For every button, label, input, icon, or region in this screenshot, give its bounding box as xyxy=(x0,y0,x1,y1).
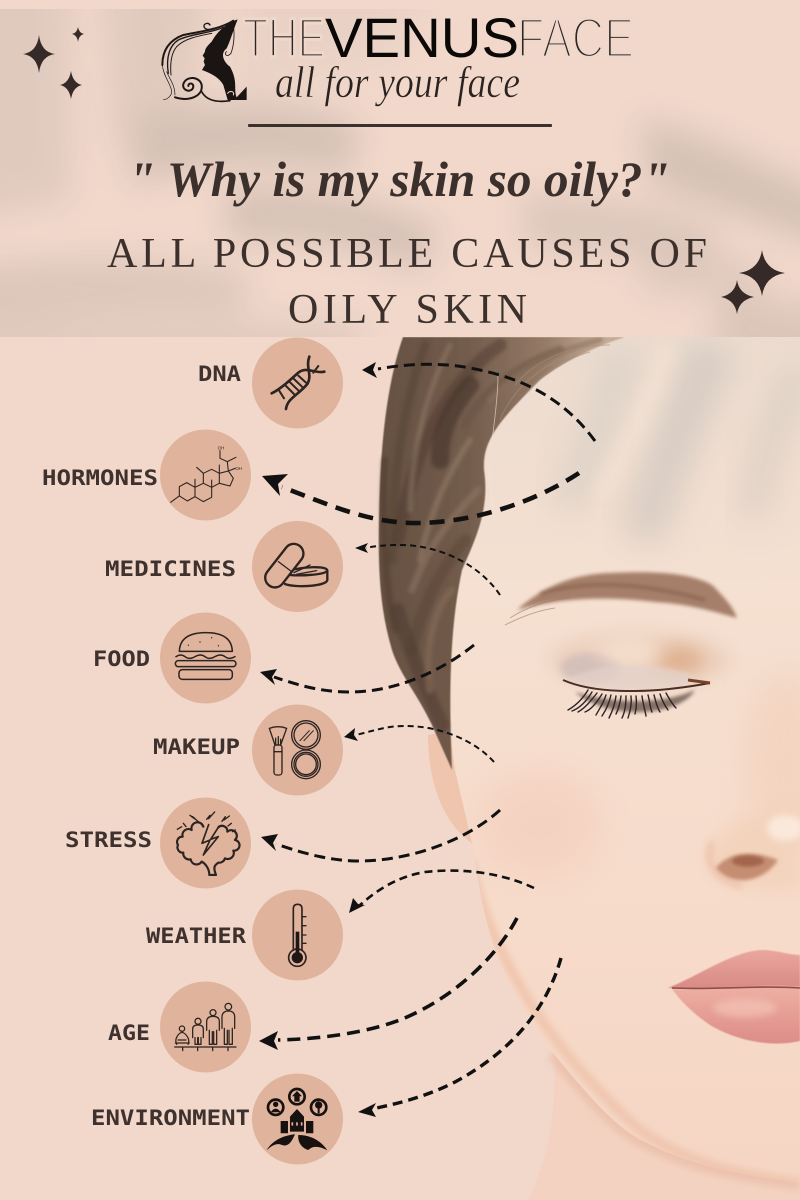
cause: age: AGE xyxy=(108,1021,150,1046)
icon: environment globe xyxy=(267,1089,327,1150)
hair strands xyxy=(384,340,600,725)
icon: brush and compacts xyxy=(269,721,320,779)
cause: food xyxy=(93,612,251,704)
icon: burger xyxy=(175,633,236,679)
icon: DNA helix xyxy=(272,357,324,409)
logo tagline: all for your face xyxy=(275,58,520,107)
heading: question: " Why is my skin so oily?" xyxy=(128,151,670,207)
heading: title: ALL POSSIBLE CAUSES OF xyxy=(107,231,707,277)
cause: age xyxy=(108,982,251,1072)
icon: pills xyxy=(261,540,327,591)
divider xyxy=(248,124,552,127)
ear xyxy=(428,734,472,843)
arrow: age xyxy=(259,918,517,1050)
icon: steroid molecule xyxy=(171,445,242,502)
blurred palm shadow backdrop xyxy=(0,9,800,337)
cause: DNA: DNA xyxy=(198,362,241,387)
arrow: medicines xyxy=(355,543,500,595)
icon: people growing xyxy=(175,1003,236,1051)
cause: medicines: MEDICINES xyxy=(105,557,236,582)
icon: steroid molecule: OH xyxy=(218,445,224,450)
logo xyxy=(162,6,634,107)
cause: hormones: HORMONES xyxy=(42,466,158,491)
logo wordmark: VENUS xyxy=(325,6,519,69)
cause: DNA xyxy=(198,338,343,428)
cause: makeup xyxy=(153,704,343,796)
hair xyxy=(379,337,625,770)
logo wordmark xyxy=(243,6,634,69)
closed eye and lashes xyxy=(563,680,710,718)
heading: title: OILY SKIN xyxy=(288,287,527,333)
cause: weather xyxy=(146,890,343,980)
cause: hormones xyxy=(42,430,251,520)
arrow: hormones xyxy=(262,473,579,523)
cause: stress xyxy=(65,798,251,888)
cause: makeup: MAKEUP xyxy=(153,735,240,760)
cause: weather: WEATHER xyxy=(146,924,246,949)
eye shadow xyxy=(548,632,732,690)
photo of woman's face xyxy=(379,337,800,1200)
face shading and palm shadow on forehead xyxy=(470,345,800,1183)
cause: environment xyxy=(91,1074,343,1164)
arrow: DNA xyxy=(362,362,595,441)
logo emblem: woman's profile with hair xyxy=(162,19,247,101)
icon: steroid molecule: OH xyxy=(235,466,242,471)
cause: stress: STRESS xyxy=(65,828,152,853)
heading: title xyxy=(107,231,707,333)
arrow: stress xyxy=(261,810,500,861)
logo wordmark: FACE xyxy=(517,6,634,69)
eyebrow xyxy=(505,572,737,625)
decorative stars top left xyxy=(23,27,84,99)
face shape xyxy=(450,720,800,1180)
nose xyxy=(703,814,800,891)
cause: medicines xyxy=(105,521,343,612)
arrow: environment xyxy=(358,958,561,1117)
cause: food: FOOD xyxy=(93,647,150,672)
arrow: food xyxy=(260,645,474,692)
arrow: weather xyxy=(349,871,534,913)
logo wordmark: THE xyxy=(243,6,325,69)
arrow: makeup xyxy=(344,726,494,762)
neck xyxy=(528,1040,800,1200)
decorative stars right xyxy=(721,250,785,314)
icon: brain with lightning xyxy=(177,812,240,875)
cause: environment: ENVIRONMENT xyxy=(91,1106,250,1131)
icon: thermometer xyxy=(289,904,306,966)
lips xyxy=(668,950,800,1044)
